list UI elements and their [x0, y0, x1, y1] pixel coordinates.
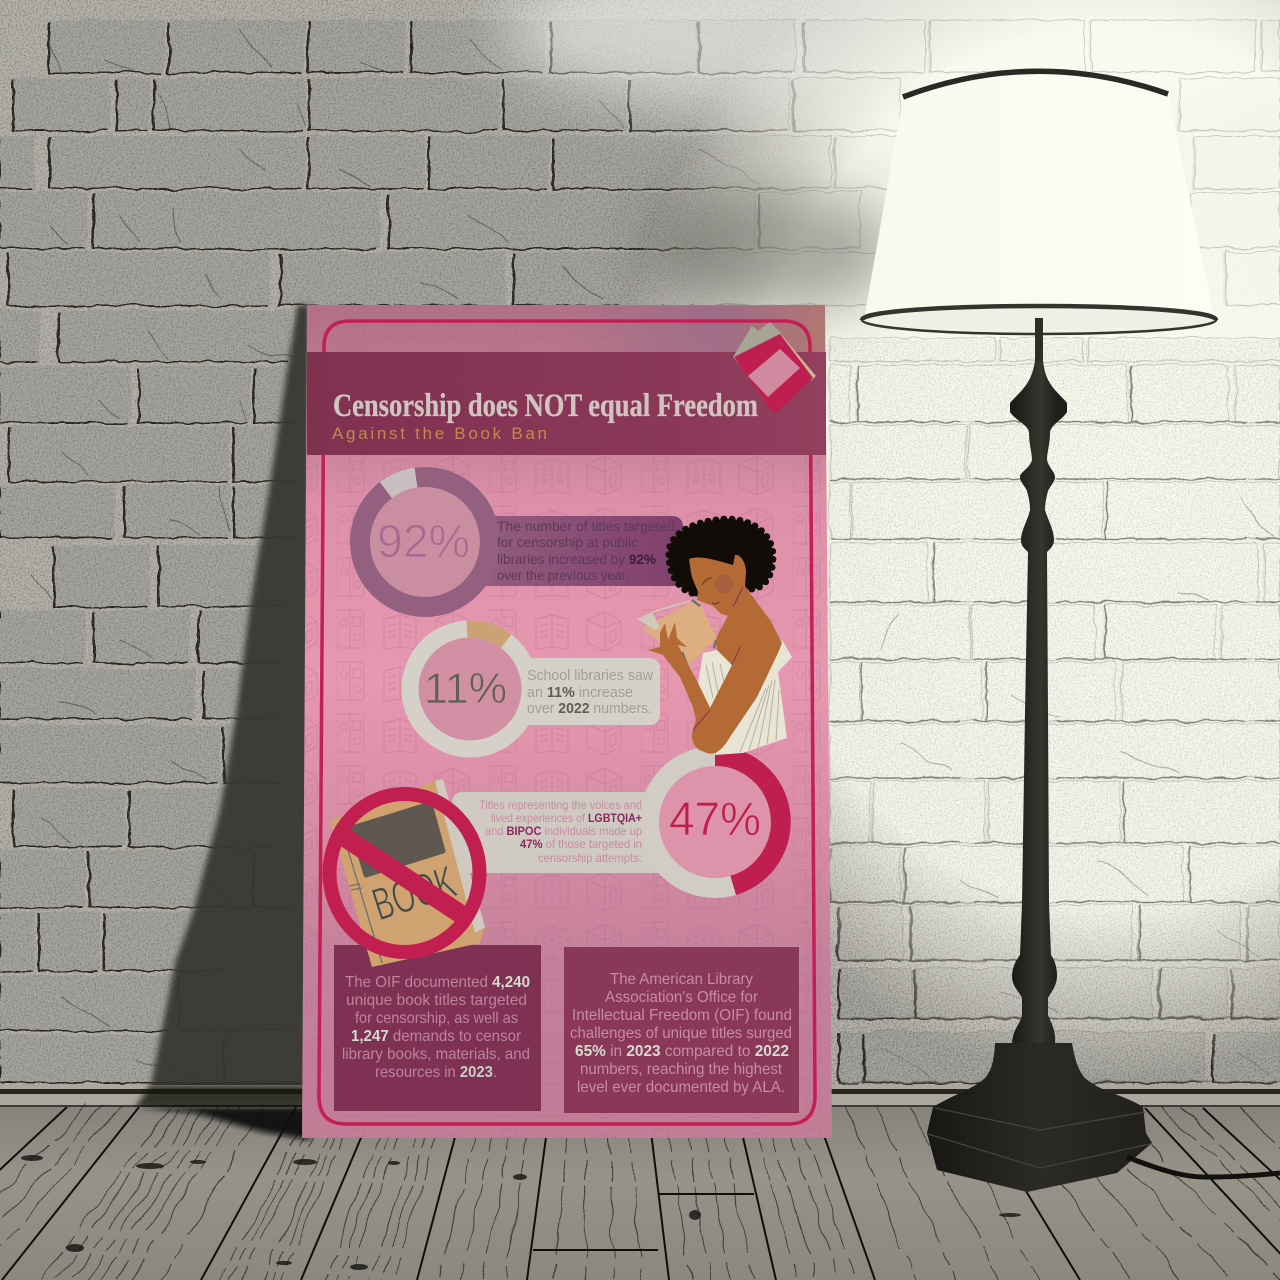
description: School libraries saw — [527, 668, 654, 684]
value: 47% — [669, 792, 761, 845]
illustration: woman reading — [637, 519, 792, 755]
description: Titles representing the voices and — [479, 799, 642, 812]
wood knots — [21, 1155, 1021, 1270]
value: 11% — [424, 665, 507, 713]
subtitle: Against the Book Ban — [332, 424, 547, 443]
header band — [307, 352, 826, 455]
description — [497, 518, 675, 583]
power cord — [1127, 1157, 1280, 1177]
open book — [637, 600, 717, 667]
face details — [693, 575, 743, 730]
lampshade shadow on the wall — [650, 188, 900, 312]
title: Censorship does NOT equal Freedom — [333, 388, 758, 424]
base moulding — [928, 1108, 1150, 1168]
poster background — [302, 305, 832, 1138]
value: 92% — [377, 515, 470, 567]
description: for censorship at public — [497, 534, 638, 550]
panel: American Library Association: numbers, reaching the highest — [580, 1061, 783, 1078]
panel: OIF documented: 1,247 demands to censor — [351, 1028, 522, 1045]
panel: OIF documented — [334, 945, 541, 1111]
floor lamp — [862, 71, 1280, 1192]
callout pill — [460, 516, 683, 586]
wood grain — [0, 1107, 1280, 1280]
description — [527, 668, 654, 717]
plank seams — [0, 1107, 1280, 1280]
stat: 47% — [452, 756, 781, 888]
panel: American Library Association: level ever documented by ALA. — [577, 1079, 785, 1096]
callout pill — [452, 792, 672, 873]
description: The number of titles targeted — [497, 518, 675, 534]
poster shadow on the wall — [150, 305, 310, 1090]
panel: OIF documented: unique book titles targeted — [346, 992, 527, 1009]
donut chart — [649, 756, 781, 888]
skin: head, neck, chest and arm — [648, 555, 782, 754]
description — [479, 799, 642, 865]
icon: red book — [733, 322, 816, 412]
description: over 2022 numbers. — [527, 701, 652, 717]
panel: OIF documented: The OIF documented 4,240 — [345, 974, 530, 991]
panel: American Library Association: 65% in 2023 compared to 2022 — [575, 1043, 789, 1060]
panel: OIF documented: resources in 2023. — [375, 1064, 497, 1081]
panel: OIF documented: library books, materials, and — [342, 1046, 530, 1063]
description: lived experiences of LGBTQIA+ — [491, 812, 642, 825]
panel: poster — [302, 305, 832, 1138]
lampshade — [865, 71, 1213, 314]
lampshade top rim — [903, 71, 1168, 97]
book icon pattern — [302, 305, 832, 1138]
prohibition sign — [330, 794, 480, 952]
panel: American Library Association: challenges of unique titles surged — [570, 1025, 792, 1042]
description: and BIPOC individuals made up — [485, 825, 642, 838]
wooden floor — [0, 1107, 1280, 1280]
donut chart — [410, 629, 530, 749]
description: libraries increased by 92% — [497, 551, 657, 567]
panel: American Library Association — [564, 947, 799, 1113]
stem top rod — [1035, 318, 1043, 360]
baseboard — [0, 1085, 1280, 1108]
stat: 11% — [410, 629, 660, 749]
lamp base — [927, 1043, 1152, 1192]
description: 47% of those targeted in — [520, 838, 642, 851]
panel: American Library Association: Intellectual Freedom (OIF) found — [572, 1007, 792, 1024]
inner frame — [319, 321, 815, 1124]
donut chart — [360, 477, 490, 607]
panel: American Library Association: Association's Office for — [605, 989, 759, 1006]
lampshade inner ellipse — [862, 306, 1216, 334]
panel: OIF documented: for censorship, as well as — [355, 1010, 518, 1027]
book — [330, 778, 485, 967]
lampshade bottom rim — [862, 306, 1216, 320]
description: an 11% increase — [527, 685, 633, 701]
hair — [669, 519, 773, 593]
dress — [698, 640, 792, 755]
description: censorship attempts. — [538, 852, 642, 865]
book: BOOK — [366, 855, 462, 931]
description: over the previous year. — [497, 567, 629, 583]
top right sheen — [560, 306, 825, 354]
icon: banned book — [330, 778, 485, 967]
panel: American Library Association: The American Library — [610, 971, 753, 988]
callout pill — [500, 658, 660, 725]
lamp stem — [1010, 318, 1067, 1045]
stat: 92% — [360, 477, 683, 607]
poster shadow on the floor — [135, 1107, 310, 1140]
